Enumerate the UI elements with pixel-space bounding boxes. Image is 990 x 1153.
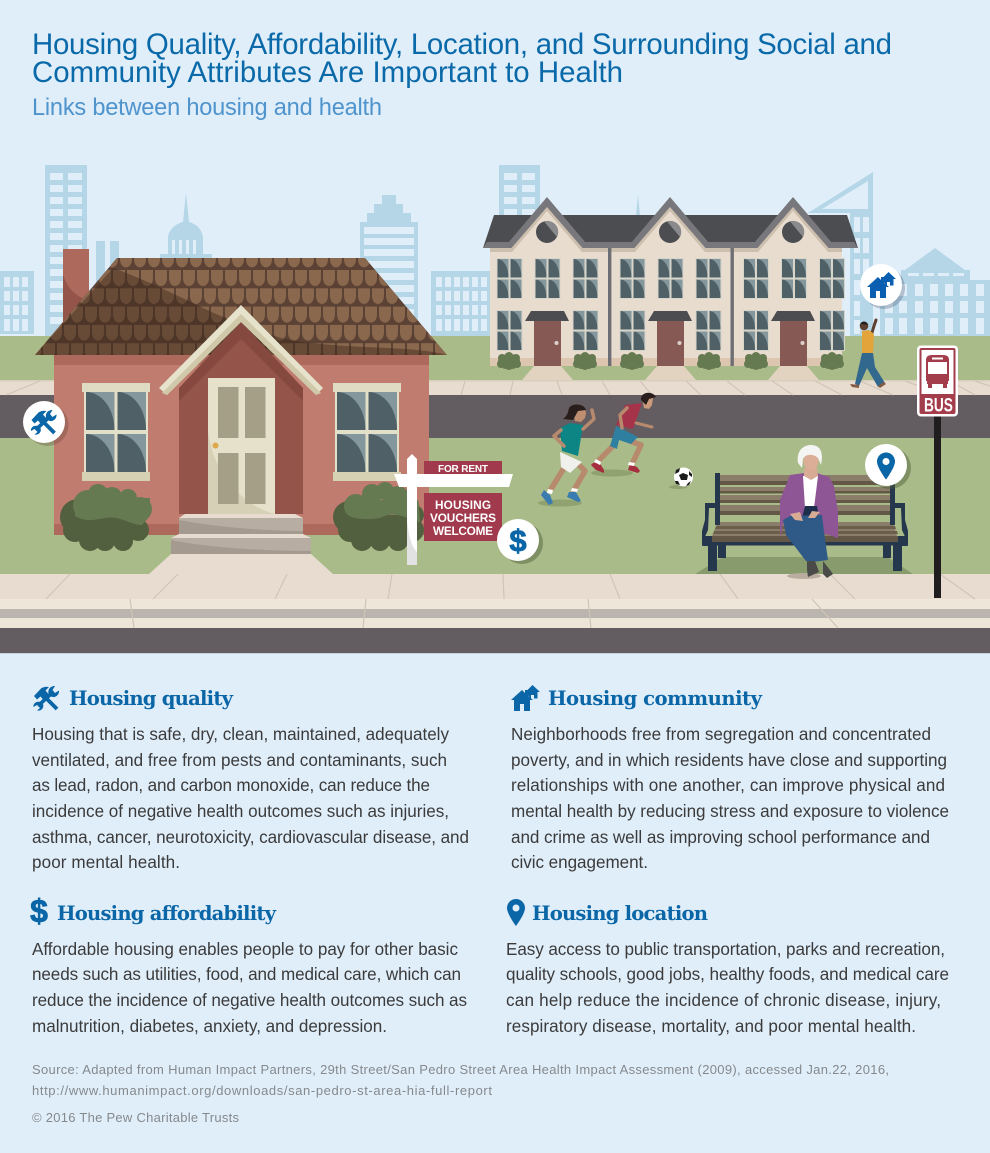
- section: housing quality: [32, 686, 469, 872]
- chimney: [63, 249, 89, 324]
- townhouse gables: [483, 197, 858, 252]
- roofline shadow: [490, 248, 842, 252]
- vouchers panel: [424, 493, 502, 541]
- vouchers panel: WELCOME: [433, 524, 493, 538]
- body text: housing affordability: reduce the incidence of negative health outcomes such as: [32, 991, 467, 1010]
- badge: housing affordability: [497, 519, 543, 564]
- heading: housing community: Housing community: [548, 687, 763, 710]
- title: Housing Quality, Affordability, Location, and Surrounding Social and: [32, 28, 892, 61]
- bench shadow: [695, 557, 913, 574]
- body text: housing location: can help reduce the incidence of chronic disease, injury,: [506, 991, 941, 1010]
- front walkway: [149, 554, 333, 574]
- townhouse body: [490, 246, 842, 366]
- skyline buildings: [0, 165, 990, 336]
- body text: housing quality: Housing that is safe, dry, clean, maintained, adequately: [32, 725, 449, 744]
- ground: upper lawn, sidewalk, road, lawn, sidewalk, curb, road: [0, 336, 990, 654]
- townhouse windows: [496, 258, 845, 351]
- body text: housing location: respiratory disease, mortality, and poor mental health.: [506, 1017, 916, 1036]
- heading: housing affordability: Housing affordability: [57, 902, 277, 925]
- body text: housing community: Neighborhoods free from segregation and concentrated: [511, 725, 931, 744]
- badge: housing quality: [23, 401, 68, 446]
- entry gable: [179, 325, 303, 514]
- source note: http://www.humanimpact.org/downloads/san-pedro-st-area-hia-full-report: [32, 1083, 492, 1098]
- roof shingles: [35, 258, 447, 355]
- body text: housing quality: asthma, cancer, neurotoxicity, cardiovascular disease, and: [32, 828, 469, 847]
- house wall: [54, 355, 429, 535]
- right window: [333, 383, 401, 481]
- front steps: [171, 514, 311, 554]
- body text: housing community: relationships with one another, can improve physical and: [511, 776, 945, 795]
- body text: housing community: mental health by reducing stress and exposure to violence: [511, 802, 949, 821]
- bench back slats: [720, 475, 890, 515]
- icon: map pin: [507, 899, 525, 926]
- round attic windows: [536, 221, 804, 243]
- section: housing affordability: [30, 893, 467, 1036]
- source note: Source: Adapted from Human Impact Partners, 29th Street/San Pedro Street Area Health Impact Assessment (2009), accessed Jan.22, 2016,: [32, 1062, 889, 1077]
- older woman seated: [780, 445, 838, 579]
- body text: housing quality: as lead, radon, and carbon monoxide, can reduce the: [32, 776, 430, 795]
- body text: housing affordability: malnutrition, diabetes, anxiety, and depression.: [32, 1017, 387, 1036]
- body text: housing community: civic engagement.: [511, 853, 648, 872]
- body text: housing location: Easy access to public transportation, parks and recreation,: [506, 940, 945, 959]
- section: housing community: [511, 685, 949, 872]
- badge: housing affordability: $: [509, 523, 527, 558]
- townhouse bushes: [497, 352, 844, 370]
- vouchers panel: HOUSING: [435, 498, 491, 512]
- icon: houses: [511, 685, 540, 711]
- badge: housing community: [860, 264, 905, 309]
- roof shadow: [35, 268, 447, 355]
- body text: housing location: [506, 940, 949, 1036]
- body text: housing quality: ventilated, and free from pests and contaminants, such: [32, 751, 447, 770]
- section: housing location: [506, 899, 949, 1036]
- right bush: [333, 482, 424, 551]
- left bush: [60, 484, 152, 551]
- soccer ball: [669, 468, 693, 489]
- body text: housing affordability: needs such as utilities, food, and medical care, which can: [32, 965, 461, 984]
- girl running: [538, 404, 594, 506]
- vouchers panel: VOUCHERS: [430, 511, 496, 525]
- bench seat: [709, 522, 899, 543]
- source note: © 2016 The Pew Charitable Trusts: [32, 1110, 240, 1125]
- townhouse doors and canopies: [525, 311, 815, 366]
- source note: [32, 1062, 889, 1125]
- body text: housing quality: incidence of negative health outcomes such as injuries,: [32, 802, 449, 821]
- boy running: [591, 393, 656, 476]
- left window: [82, 383, 150, 481]
- townhouse walkways: [522, 366, 819, 380]
- body text: housing location: quality schools, good jobs, healthy foods, and medical care: [506, 965, 949, 984]
- bus stop sign: [917, 346, 958, 598]
- front door: [208, 378, 275, 514]
- subtitle: Links between housing and health: [32, 95, 382, 121]
- icon: dollar: $: [30, 893, 48, 929]
- body text: housing quality: [32, 725, 469, 872]
- house: [35, 249, 447, 574]
- bus icon: [926, 355, 949, 388]
- title: Community Attributes Are Important to Health: [32, 56, 623, 89]
- title: [32, 28, 892, 89]
- townhouses: [483, 197, 858, 380]
- body text: housing affordability: [32, 940, 467, 1036]
- unit dividers: [608, 248, 734, 366]
- gable trim: [159, 305, 323, 395]
- sign post: [407, 454, 417, 565]
- sign crossbar: [394, 474, 513, 487]
- bus stop sign: BUS: [924, 394, 953, 416]
- townhouse base band: [490, 358, 842, 366]
- roof: [35, 258, 447, 355]
- man waving: [850, 320, 886, 388]
- illustration: neighborhood street scene: [0, 165, 990, 654]
- for rent sign: [394, 454, 513, 565]
- body text: housing affordability: Affordable housing enables people to pay for other basic: [32, 940, 458, 959]
- icon: tools: [33, 686, 59, 711]
- body text: housing community: poverty, and in which residents have close and supporting: [511, 751, 947, 770]
- bench frame: [702, 473, 908, 571]
- heading: housing location: Housing location: [532, 902, 708, 925]
- park bench: [695, 473, 913, 574]
- body text: housing community: and crime as well as improving school performance and: [511, 828, 930, 847]
- body text: housing community: [511, 725, 949, 872]
- body text: housing quality: poor mental health.: [32, 853, 180, 872]
- heading: housing quality: Housing quality: [69, 687, 234, 710]
- badge: housing location: [865, 444, 911, 489]
- for rent panel: FOR RENT: [438, 464, 488, 475]
- townhouse roof: [483, 215, 858, 248]
